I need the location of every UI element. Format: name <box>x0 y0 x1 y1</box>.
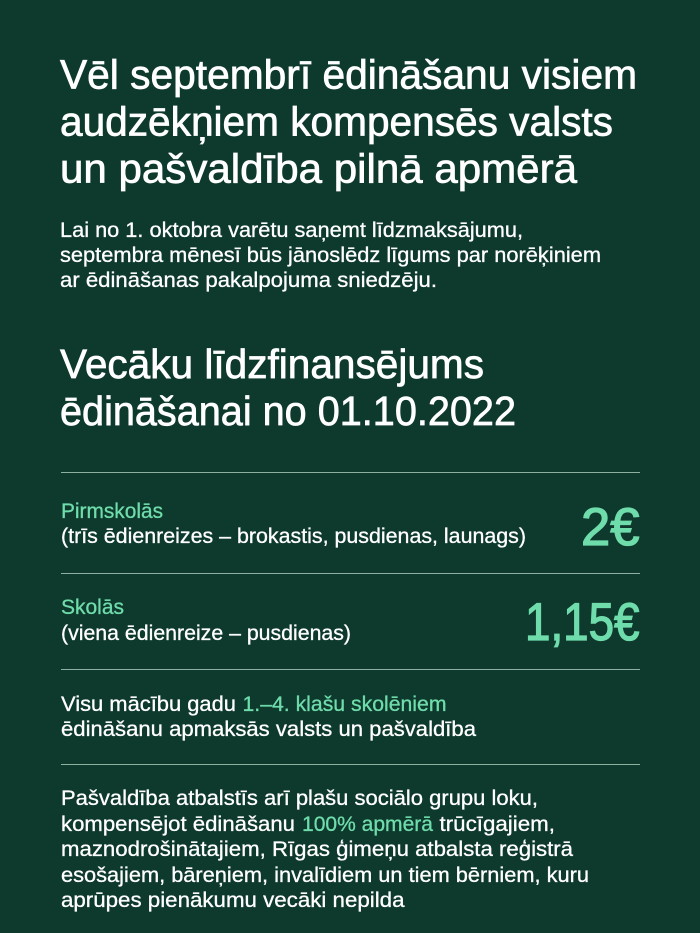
note: grades 1-4 <box>61 693 476 741</box>
note: grades 1-4: Visu mācību gadu <box>61 693 236 716</box>
intro text block: Lai no 1. oktobra varētu saņemt līdzmaksājumu, <box>60 219 523 242</box>
note: grades 1-4: ēdināšanu apmaksās valsts un pašvaldība <box>61 718 476 741</box>
note: municipality support: Pašvaldība atbalstīs arī plašu sociālo grupu loku, <box>61 787 538 810</box>
title <box>60 52 637 192</box>
row: preschool price <box>61 498 640 557</box>
row: preschool price: Pirmskolās <box>61 500 163 523</box>
title: audzēkņiem kompensēs valsts <box>60 98 613 144</box>
price: 2€: 2€ <box>581 498 640 557</box>
note: municipality support: aprūpes pienākumu vecāki nepilda <box>61 889 405 912</box>
note: grades 1-4: 1.–4. klašu skolēniem <box>242 693 446 716</box>
row: preschool price: (trīs ēdienreizes – brokastis, pusdienas, launags) <box>61 525 526 548</box>
section heading <box>60 341 516 434</box>
note: municipality support <box>61 787 589 912</box>
intro text block <box>60 219 601 292</box>
price: 1,15€: 1,15€ <box>525 593 640 652</box>
section heading: Vecāku līdzfinansējums <box>60 341 484 387</box>
note: municipality support: trūcīgajiem, <box>440 813 555 836</box>
title: Vēl septembrī ēdināšanu visiem <box>60 52 637 98</box>
note: municipality support: 100% apmērā <box>302 813 433 836</box>
row: school price: (viena ēdienreize – pusdienas) <box>61 622 351 645</box>
note: municipality support: esošajiem, bāreņiem, invalīdiem un tiem bērniem, kuru <box>61 864 589 887</box>
note: municipality support: kompensējot ēdināšanu <box>61 813 295 836</box>
intro text block: ar ēdināšanas pakalpojuma sniedzēju. <box>60 269 437 292</box>
intro text block: septembra mēnesī būs jānoslēdz līgums par norēķiniem <box>60 244 601 267</box>
title: un pašvaldība pilnā apmērā <box>60 146 577 192</box>
row: school price <box>61 593 640 652</box>
section heading: ēdināšanai no 01.10.2022 <box>60 388 516 434</box>
note: municipality support: maznodrošinātajiem, Rīgas ģimeņu atbalsta reģistrā <box>61 838 573 861</box>
row: school price: Skolās <box>61 596 124 619</box>
